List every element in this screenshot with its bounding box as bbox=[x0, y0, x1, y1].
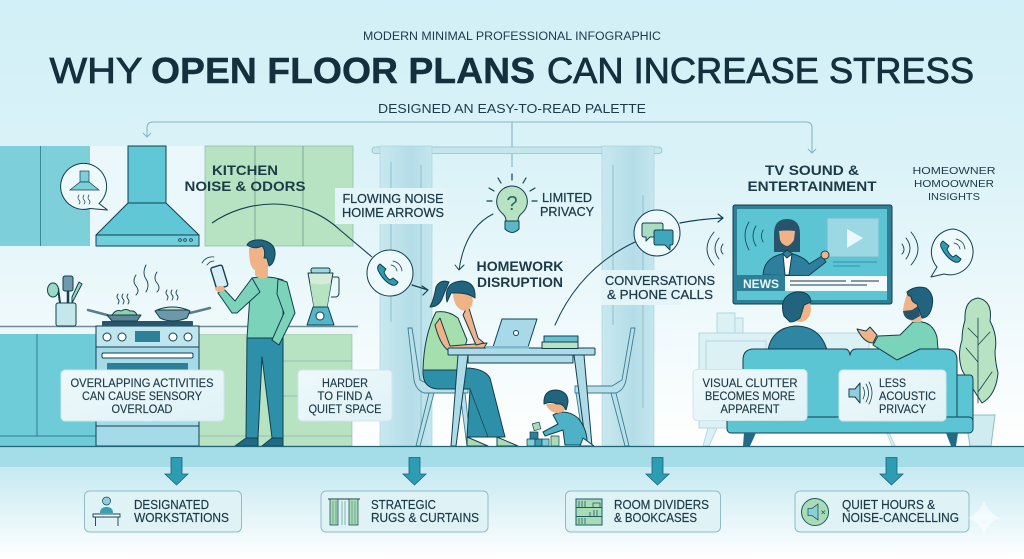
label: flowing noise: FLOWING NOISE bbox=[342, 192, 444, 206]
callout: acoustic privacy bbox=[839, 370, 946, 421]
pots and steam bbox=[88, 265, 210, 321]
lower cabinets bbox=[0, 334, 352, 446]
eyebrow text: MODERN MINIMAL PROFESSIONAL INFOGRAPHIC bbox=[363, 31, 661, 43]
dining chairs bbox=[408, 328, 635, 446]
icon: desk bbox=[93, 497, 120, 526]
label: conversations bbox=[601, 270, 715, 305]
icon: lightbulb: ? bbox=[506, 193, 518, 215]
arrow: down 2 bbox=[403, 458, 426, 485]
television: NEWS bbox=[743, 279, 779, 291]
stacked books bbox=[542, 336, 578, 348]
arrow: down 1 bbox=[165, 458, 188, 485]
solution: rugs and curtains: STRATEGIC bbox=[371, 498, 436, 512]
bracket connector arrows bbox=[143, 122, 816, 167]
label: conversations: & PHONE CALLS bbox=[607, 288, 713, 302]
sound waves bbox=[707, 232, 918, 265]
television bbox=[733, 205, 892, 304]
title bbox=[50, 50, 974, 91]
person on phone bbox=[202, 240, 295, 446]
dining table bbox=[448, 348, 595, 446]
label: homeowner insights: HOMOOWNER bbox=[914, 178, 994, 190]
countertop bbox=[0, 326, 358, 334]
label: limited privacy: LIMITED bbox=[542, 191, 592, 205]
floor band bbox=[0, 446, 1024, 467]
heading: kitchen noise: KITCHEN bbox=[212, 162, 278, 178]
title: OPEN FLOOR PLANS bbox=[151, 50, 535, 91]
label: limited privacy: PRIVACY bbox=[540, 205, 595, 219]
panel: living room bbox=[693, 162, 998, 446]
heading: tv sound: TV SOUND & bbox=[765, 162, 859, 178]
arrow: down 3 bbox=[646, 458, 669, 485]
callout: quiet space: TO FIND A bbox=[318, 391, 373, 403]
heading: tv sound: ENTERTAINMENT bbox=[748, 178, 877, 194]
viewer left bbox=[768, 292, 827, 350]
plant bbox=[960, 298, 998, 446]
upper cabinets bbox=[0, 146, 353, 246]
arrow: chat to tv bbox=[680, 214, 723, 223]
heading: tv sound bbox=[748, 162, 877, 194]
heading: kitchen noise bbox=[184, 162, 306, 194]
label: flowing noise bbox=[335, 188, 447, 224]
solution: room dividers: & BOOKCASES bbox=[614, 511, 697, 525]
callout: acoustic privacy: LESS bbox=[879, 378, 906, 390]
arrow to student bbox=[412, 285, 428, 295]
icon: phone circle bbox=[367, 250, 413, 296]
label: flowing noise: HOIME ARROWS bbox=[342, 206, 444, 220]
solution: quiet hours: NOISE-CANCELLING bbox=[842, 511, 959, 525]
label: limited privacy bbox=[540, 191, 595, 219]
callout: quiet space: HARDER bbox=[322, 378, 368, 390]
heading: kitchen noise: NOISE & ODORS bbox=[184, 178, 306, 194]
solution: designated workstations: WORKSTATIONS bbox=[134, 511, 229, 525]
solution: room dividers bbox=[566, 491, 720, 532]
solution: quiet hours: QUIET HOURS & bbox=[842, 498, 936, 512]
heading: homework disruption bbox=[476, 258, 564, 290]
student bbox=[423, 281, 518, 446]
arrow: bulb to student bbox=[455, 214, 493, 270]
panel: kitchen bbox=[0, 146, 372, 446]
icon: curtains bbox=[328, 499, 360, 525]
callout: visual clutter: BECOMES MORE bbox=[705, 391, 795, 403]
icon: lightbulb bbox=[487, 174, 537, 232]
icon: muted speaker bbox=[802, 498, 828, 526]
arrow: down 4 bbox=[880, 458, 903, 485]
icon: chat circle bbox=[634, 210, 680, 256]
callout: sensory overload bbox=[61, 370, 224, 421]
callout: visual clutter: APPARENT bbox=[720, 404, 780, 416]
curtains and rod bbox=[372, 146, 662, 446]
callout: visual clutter bbox=[693, 370, 807, 420]
range hood bbox=[96, 146, 199, 246]
icon: utensil cup bbox=[48, 276, 82, 326]
stove bbox=[96, 321, 199, 446]
icon: hood speech bubble bbox=[61, 163, 108, 210]
callout: sensory overload: CAN CAUSE SENSORY bbox=[82, 391, 202, 403]
heading: homework disruption: HOMEWORK bbox=[476, 258, 564, 274]
laptop bbox=[486, 319, 537, 348]
callout: sensory overload: OVERLOAD bbox=[112, 404, 172, 416]
solution: rugs and curtains bbox=[321, 491, 488, 532]
heading: homework disruption: DISRUPTION bbox=[477, 274, 563, 290]
sparkle watermark bbox=[968, 500, 1000, 536]
title: WHY bbox=[50, 50, 142, 91]
viewer right bbox=[857, 287, 938, 360]
icon: blender bbox=[307, 268, 339, 325]
arrow: chat to table bbox=[555, 242, 635, 325]
solution: rugs and curtains: RUGS & CURTAINS bbox=[371, 511, 479, 525]
callout: acoustic privacy: ACOUSTIC bbox=[879, 391, 936, 403]
label: homeowner insights: INSIGHTS bbox=[928, 191, 980, 203]
solution: room dividers: ROOM DIVIDERS bbox=[614, 498, 709, 512]
callout: quiet space bbox=[298, 370, 392, 421]
solution: designated workstations bbox=[84, 491, 242, 532]
callout: quiet space: QUIET SPACE bbox=[308, 404, 382, 416]
label: conversations: CONVERSATIONS bbox=[605, 274, 715, 288]
sofa bbox=[727, 349, 973, 446]
callout: sensory overload: OVERLAPPING ACTIVITIES bbox=[70, 378, 214, 390]
console and frames bbox=[699, 313, 895, 446]
label: homeowner insights: HOMEOWNER bbox=[912, 165, 996, 177]
solution: quiet hours bbox=[795, 491, 969, 532]
solution: designated workstations: DESIGNATED bbox=[134, 498, 209, 512]
child with blocks bbox=[527, 390, 594, 446]
icon: bookcase bbox=[576, 499, 602, 525]
panel: homework zone bbox=[298, 146, 723, 446]
noise flow curve bbox=[212, 204, 372, 257]
icon: phone bubble bbox=[931, 229, 973, 277]
callout: acoustic privacy: PRIVACY bbox=[879, 404, 926, 416]
callout: visual clutter: VISUAL CLUTTER bbox=[702, 378, 798, 390]
subtitle: DESIGNED AN EASY-TO-READ PALETTE bbox=[378, 102, 646, 116]
title: CAN INCREASE STRESS bbox=[547, 50, 974, 91]
label: homeowner insights bbox=[912, 165, 996, 203]
